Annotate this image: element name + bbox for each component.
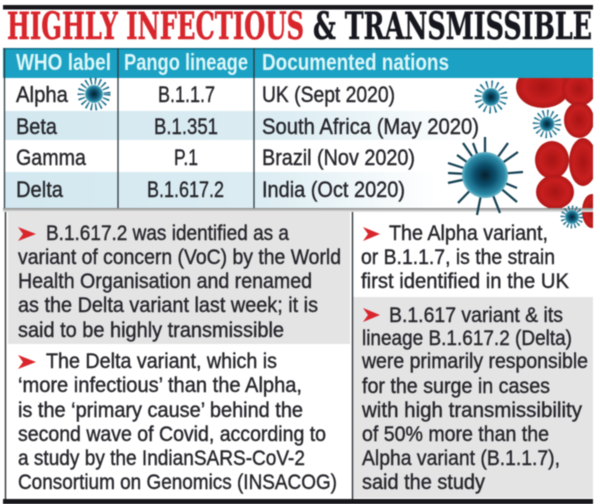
- panel: B.1.617.2 note: variant of concern (VoC) by the World: [18, 246, 341, 269]
- row: Gamma: Gamma: [16, 145, 87, 170]
- icon: large virus: [448, 137, 523, 215]
- row: Gamma: [16, 145, 415, 170]
- title: HIGHLY INFECTIOUS: [7, 4, 304, 48]
- row: Delta: India (Oct 2020): [262, 177, 405, 202]
- panel: B.1.617.2 note: Health Organisation and renamed: [18, 270, 312, 293]
- table header: Documented nations: [262, 49, 449, 75]
- row: Alpha: UK (Sept 2020): [262, 82, 395, 107]
- panel: Delta variant note: a study by the IndianSARS-CoV-2: [18, 447, 305, 470]
- panel: B.1.617 note: for the surge in cases: [362, 375, 550, 398]
- panel: right column: [353, 222, 593, 498]
- icon: small virus lower: [563, 208, 581, 226]
- panel: Alpha variant note: first identified in the UK: [361, 270, 569, 293]
- row: Beta: B.1.351: [154, 114, 218, 139]
- panel: Alpha variant note: [361, 222, 569, 293]
- row: Alpha: Alpha: [16, 82, 69, 107]
- illustration: blood cells: [515, 77, 594, 229]
- table header: WHO label: [16, 49, 111, 75]
- panel: B.1.617.2 note: said to be highly transmissible: [18, 319, 284, 342]
- panel: left column: [8, 212, 350, 494]
- arrow bullet: [18, 227, 36, 241]
- arrow bullet: [363, 227, 380, 241]
- icon: small virus middle: [536, 113, 558, 135]
- row: Alpha: [16, 82, 395, 107]
- row: Gamma: P.1: [174, 145, 198, 170]
- row: Gamma: Brazil (Nov 2020): [262, 145, 415, 170]
- panel: Delta variant note: ‘more infectious’ than the Alpha,: [18, 374, 302, 397]
- panel: B.1.617 note: Alpha variant (B.1.1.7),: [362, 447, 560, 470]
- row: Alpha: B.1.1.7: [158, 82, 215, 107]
- panel: Alpha variant note: The Alpha variant,: [389, 222, 548, 245]
- row: Delta: Delta: [16, 177, 64, 202]
- table bottom shadow: [3, 208, 593, 212]
- row: Delta: [5, 172, 435, 208]
- panel: B.1.617 note: [353, 297, 593, 498]
- table header: [3, 48, 593, 78]
- row: Beta: South Africa (May 2020): [262, 114, 479, 139]
- panel: Delta variant note: [18, 350, 337, 494]
- panel: Delta variant note: The Delta variant, which is: [46, 350, 277, 373]
- row: Delta: B.1.617.2: [147, 177, 224, 202]
- panel: B.1.617.2 note: [8, 212, 350, 344]
- panel: Alpha variant note: or B.1.1.7, is the strain: [361, 246, 555, 269]
- icon: virus beside Alpha: [81, 81, 107, 107]
- panel: Delta variant note: is the ‘primary cause’ behind the: [18, 399, 303, 422]
- panel: B.1.617.2 note: B.1.617.2 was identified as a: [46, 222, 289, 245]
- panel: B.1.617 note: lineage B.1.617.2 (Delta): [362, 327, 572, 350]
- panel: Delta variant note: Consortium on Genomics (INSACOG): [18, 471, 337, 494]
- panel: Delta variant note: second wave of Covid, according to: [18, 423, 326, 446]
- icon: small virus upper: [478, 84, 504, 110]
- arrow bullet: [363, 308, 380, 322]
- row: Beta: Beta: [16, 114, 58, 139]
- table header: Pango lineage: [124, 49, 248, 75]
- panel: B.1.617 note: B.1.617 variant & its: [389, 304, 563, 327]
- panel: B.1.617 note: were primarily responsible: [361, 350, 588, 373]
- bottom rule: [3, 499, 593, 504]
- arrow bullet: [18, 355, 36, 369]
- row: Beta: [5, 111, 479, 140]
- panel: B.1.617.2 note: as the Delta variant last week; it is: [18, 294, 318, 317]
- table: [3, 48, 593, 209]
- panel: B.1.617 note: of 50% more than the: [362, 423, 549, 446]
- top rule: [3, 5, 593, 10]
- panel: B.1.617 note: with high transmissibility: [361, 399, 582, 422]
- panel: B.1.617 note: said the study: [362, 471, 485, 494]
